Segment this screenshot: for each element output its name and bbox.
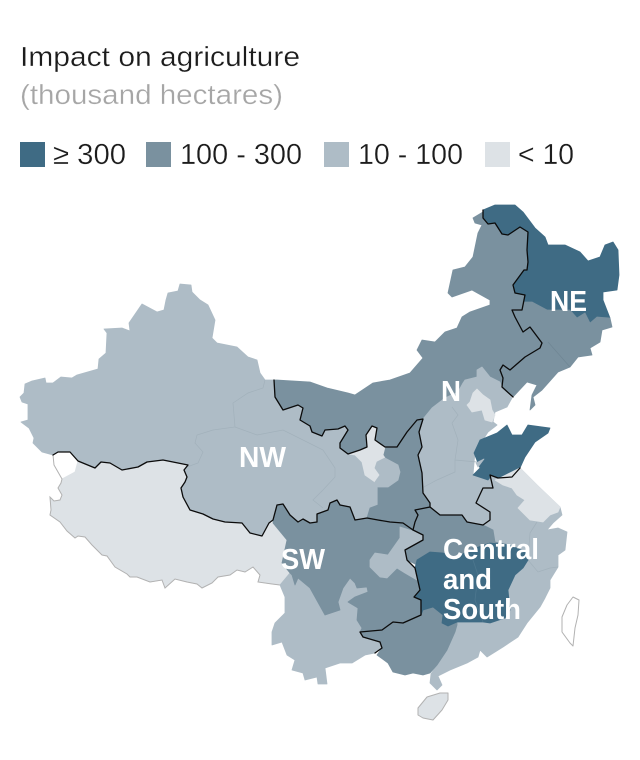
provinces: Hebei, Shanxi, Henan: [418, 367, 512, 525]
island: Taiwan: [562, 597, 579, 646]
province: Guangxi: [360, 605, 457, 675]
province: Shandong: [473, 425, 550, 480]
provinces: east and south coast: [430, 468, 567, 690]
province: Jiangsu: [495, 468, 560, 522]
province: Hainan: [418, 693, 448, 720]
province: Chongqing: [370, 527, 423, 580]
province: Inner Mongolia and north arc: [274, 212, 542, 454]
provinces: Jilin and Liaoning: [500, 295, 612, 410]
province: central Shaanxi light: [375, 458, 400, 487]
province: Yunnan: [272, 570, 382, 684]
region label: Central and South: South: [443, 594, 521, 626]
region label: NW: NW: [239, 442, 287, 474]
province: Shaanxi: [367, 419, 430, 530]
Tibet grey coast outline: [50, 455, 280, 588]
provinces: Sichuan and Guizhou: [273, 500, 423, 632]
province: Hubei: [405, 507, 528, 570]
legend item: under 10: < 10: [518, 139, 574, 171]
title: Impact on agriculture: [20, 41, 300, 72]
regional boundaries: [53, 210, 542, 653]
province group: northwest: [20, 284, 378, 536]
legend item: 100 to 300: 100 - 300: [180, 139, 302, 171]
region label: NE: NE: [550, 286, 587, 318]
legend item: 300 and above: [20, 139, 126, 171]
legend item: 300 and above: ≥ 300: [53, 139, 126, 171]
region label: Central and South: Central: [443, 534, 539, 566]
provinces: Hunan and Jiangxi: [414, 543, 528, 626]
region label: Central and South: [443, 534, 539, 626]
province: Tibet: [50, 460, 290, 588]
region label: SW: SW: [281, 544, 326, 576]
subtitle: (thousand hectares): [20, 79, 283, 110]
province: Ningxia: [348, 426, 385, 482]
region label: N: N: [441, 376, 461, 408]
province: Heilongjiang: [483, 205, 619, 323]
legend item: 10 to 100: 10 - 100: [358, 139, 463, 171]
region label: Central and South: and: [443, 564, 492, 596]
legend: [20, 139, 574, 171]
map of China by province: [20, 205, 619, 720]
provinces: Beijing and Tianjin: [467, 389, 495, 422]
legend item: under 10: [485, 139, 574, 171]
